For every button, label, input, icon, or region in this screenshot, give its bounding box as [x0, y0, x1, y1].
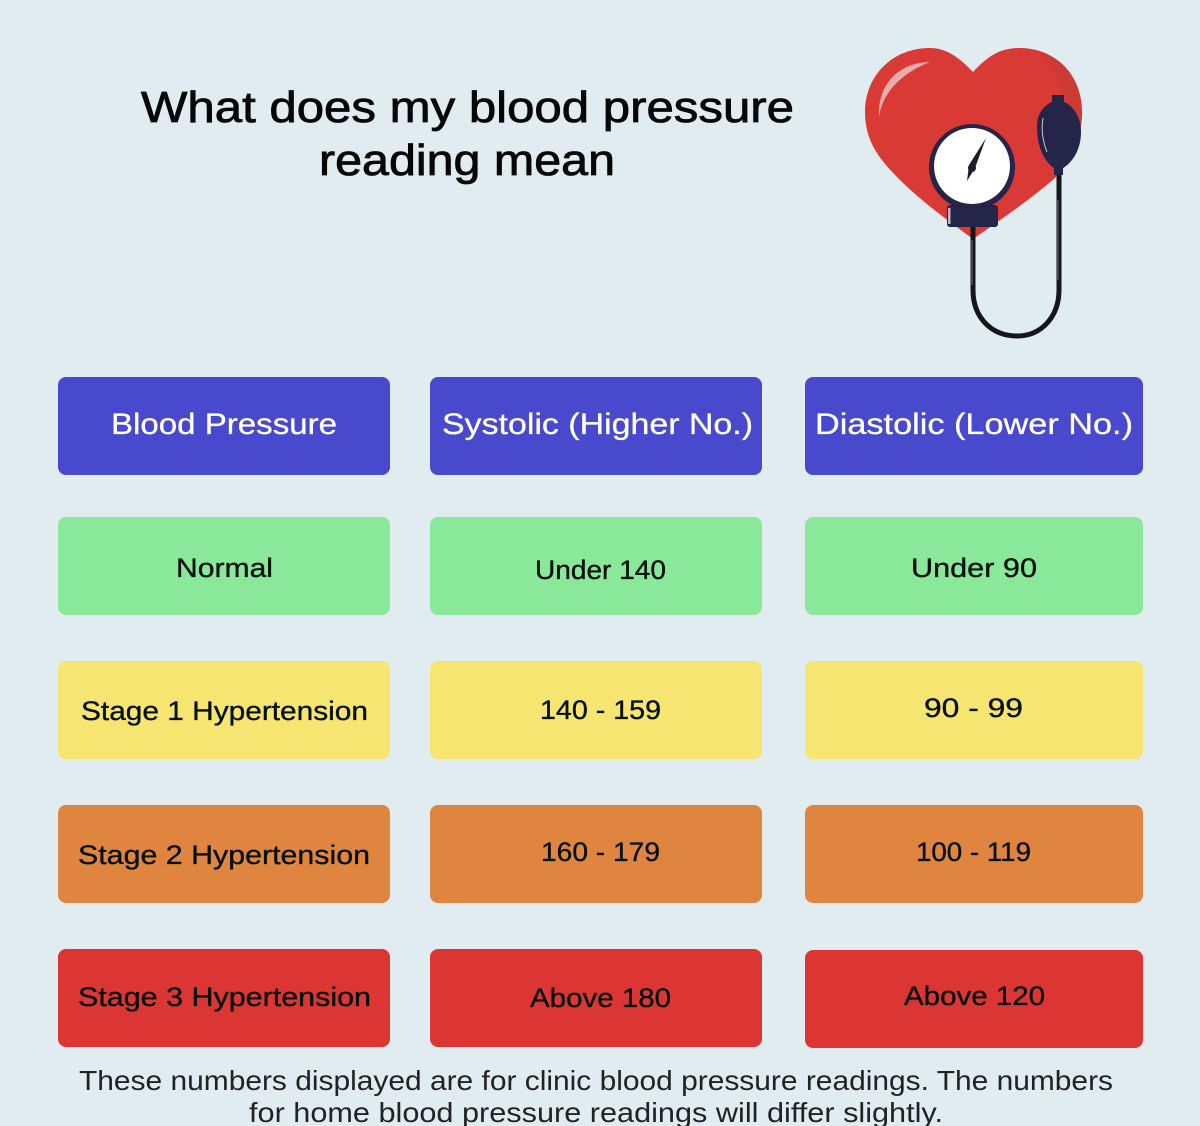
header: blood pressure: Blood Pressure [111, 408, 337, 441]
row: stage 3 hypertension: Stage 3 Hypertension [78, 982, 371, 1012]
title [141, 83, 794, 185]
heart shading [1038, 51, 1082, 152]
header: systolic [430, 377, 762, 475]
table header row [58, 377, 1143, 475]
row: stage 1 hypertension: 140 - 159 [540, 695, 661, 725]
row: stage 1 hypertension: 90 - 99 [924, 693, 1023, 723]
row: stage 2 hypertension [58, 805, 1143, 903]
bulb [1037, 95, 1081, 175]
title: What does my blood pressure [141, 83, 794, 132]
header: blood pressure [58, 377, 390, 475]
heart [865, 48, 1082, 239]
row: normal: Under 90 [911, 553, 1037, 583]
footnote: These numbers displayed are for clinic blood pressure readings. The numbers [79, 1065, 1113, 1096]
row: stage 3 hypertension: Above 120 [904, 981, 1045, 1011]
header: diastolic [805, 377, 1143, 475]
footnote [79, 1065, 1113, 1126]
row: stage 2 hypertension: 100 - 119 [916, 837, 1031, 867]
row: stage 3 hypertension [58, 949, 1143, 1048]
row: stage 1 hypertension [58, 661, 1143, 759]
row: stage 1 hypertension: Stage 1 Hypertension [81, 696, 368, 726]
tube [972, 172, 1059, 336]
row: normal: Under 140 [535, 555, 666, 585]
row: stage 3 hypertension: Above 180 [530, 983, 671, 1013]
row: stage 2 hypertension: Stage 2 Hypertension [78, 840, 370, 870]
row: normal [58, 517, 1143, 615]
header: diastolic: Diastolic (Lower No.) [815, 408, 1133, 441]
header: systolic: Systolic (Higher No.) [442, 408, 753, 441]
row: stage 2 hypertension: 160 - 179 [541, 837, 660, 867]
row: normal: Normal [176, 553, 273, 583]
title: reading mean [319, 136, 615, 185]
gauge [929, 124, 1015, 227]
heart highlight [879, 62, 930, 117]
icon: heart with blood pressure gauge [865, 48, 1082, 336]
